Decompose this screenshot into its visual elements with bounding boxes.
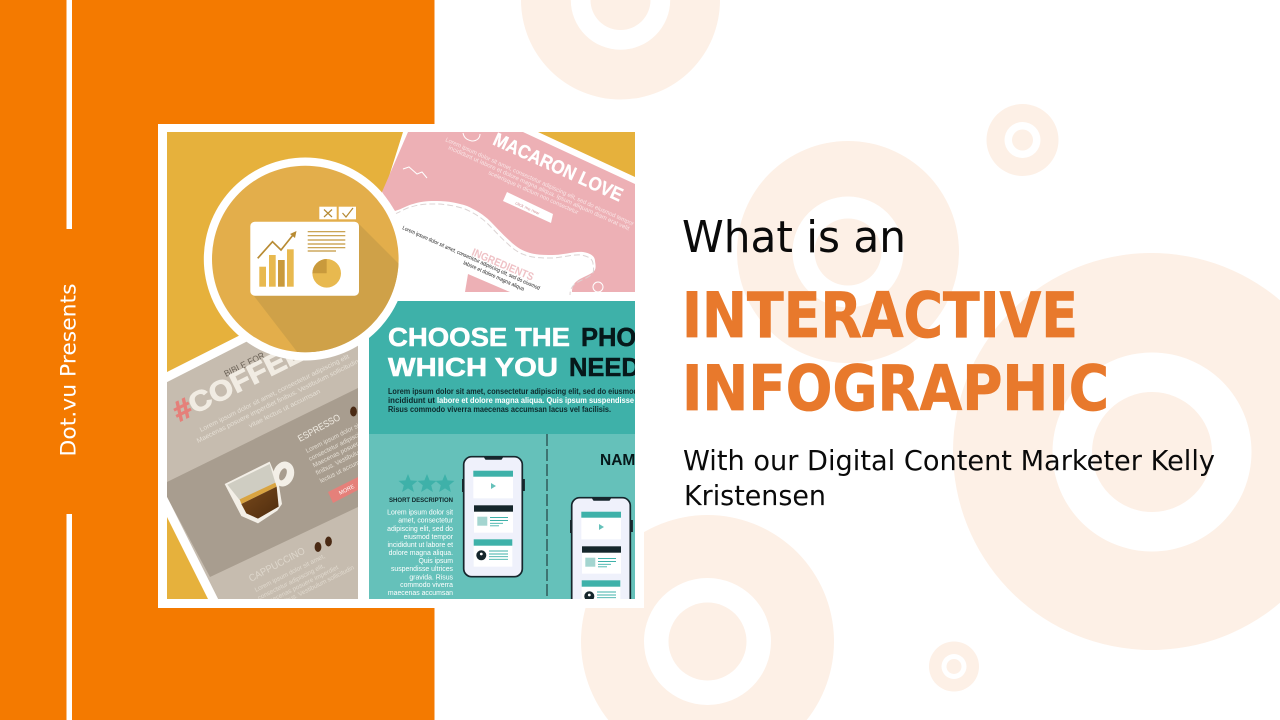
intro line 3: Risus commodo viverra maecenas accumsan lacus vel facilisis. bbox=[388, 404, 611, 414]
tile: macaron love bbox=[380, 129, 635, 295]
icon: check box bbox=[339, 207, 356, 219]
cappuccino lorem: Lorem ipsum dolor sit amet, bbox=[254, 553, 327, 594]
sidebar label: Dot.vu Presents bbox=[56, 284, 82, 456]
coffee darker band bbox=[167, 388, 358, 577]
short description body: Quis ipsum bbox=[419, 558, 453, 565]
short description body: Lorem ipsum dolor sit bbox=[387, 510, 453, 517]
dashboard card bbox=[250, 222, 359, 296]
title line: infographic: INFOGRAPHIC bbox=[682, 352, 1109, 425]
ingredients heading: INGREDIENTS bbox=[470, 247, 535, 284]
bar chart bbox=[259, 249, 294, 287]
coffee title: #COFFEE bbox=[168, 336, 310, 427]
coffee lorem line 1: Lorem ipsum dolor sit amet, consectetur adipiscing elit bbox=[199, 353, 351, 434]
small ring bbox=[593, 282, 603, 292]
intro line 1: Lorem ipsum dolor sit amet, consectetur adipiscing elit, sed do eiusmod bbox=[388, 386, 638, 396]
teal header band bbox=[369, 301, 635, 434]
macaron button bbox=[503, 192, 553, 223]
title line: what is an: What is an bbox=[682, 212, 906, 263]
zigzag icon bbox=[403, 167, 427, 178]
coffee subtitle: BIBLE FOR bbox=[222, 350, 267, 379]
macaron button label: click me now bbox=[515, 200, 540, 216]
intro line 2 white: labore et dolore magna aliqua. Quis ipsum suspendisse bbox=[437, 395, 634, 405]
espresso lorem bbox=[306, 423, 358, 483]
sidebar line: top bbox=[66, 0, 72, 229]
icon: coffee cup bbox=[225, 459, 297, 523]
title line: interactive: INTERACTIVE bbox=[682, 279, 1078, 352]
dashed blob outline bbox=[395, 204, 594, 295]
ingredients button bbox=[465, 274, 510, 292]
short description body: amet, consectetur bbox=[398, 518, 454, 525]
subtitle line 1: With our Digital Content Marketer Kelly bbox=[683, 444, 1215, 477]
coffee lorem line 2: Maecenas posuere imperdiet finibus. Vestibulum sollicitudin bbox=[196, 358, 360, 445]
background ring: centre behind heading bbox=[737, 141, 959, 363]
headline line 1: CHOOSE THE bbox=[388, 324, 570, 352]
cake icon bbox=[463, 133, 480, 141]
icon: three stars bbox=[398, 474, 454, 492]
tile: coffee bbox=[167, 342, 358, 599]
cappuccino heading: CAPPUCCINO bbox=[247, 546, 307, 585]
cappuccino lorem: Maecenas posuere imperdiet bbox=[264, 564, 340, 607]
collage contents bbox=[167, 132, 635, 599]
icon: espresso bean bbox=[350, 406, 357, 416]
espresso heading: ESPRESSO bbox=[296, 412, 343, 445]
headline line 2 dark word: NEED bbox=[569, 354, 640, 382]
espresso lorem: consectetur adipiscing bbox=[308, 429, 367, 463]
icon: phone one bbox=[462, 457, 525, 577]
icon: phone two bbox=[570, 498, 633, 618]
icon: cappuccino beans bbox=[315, 536, 332, 552]
second column name: NAME bbox=[600, 452, 646, 469]
ingredients lorem line 2: labore et dolore magna aliqua bbox=[462, 260, 526, 293]
short description body: dolore magna aliqua. bbox=[389, 550, 453, 557]
subtitle line 2: Kristensen bbox=[684, 479, 826, 512]
white blob bbox=[380, 192, 596, 292]
badge: chart icon circle bbox=[204, 158, 470, 440]
background ring: top bbox=[521, 0, 720, 100]
teal lower band bbox=[369, 434, 635, 599]
tile: choose the phone bbox=[369, 301, 635, 599]
trend arrow bbox=[258, 231, 296, 258]
macaron lorem line 1: Lorem ipsum dolor sit amet, consectetur adipiscing elit, sed do eiusmod tempor bbox=[444, 137, 634, 228]
panel: orange sidebar bbox=[0, 0, 434, 720]
panel: infographic collage frame bbox=[158, 124, 672, 618]
short description body: eiusmod tempor bbox=[404, 534, 454, 541]
coffee lorem line 3: vitae lectus ut accumsan bbox=[248, 388, 322, 430]
more button bbox=[328, 477, 358, 503]
macaron lorem line 3: scelerisque in dictum non consectetur bbox=[487, 170, 579, 216]
background ring: bottom centre bbox=[581, 515, 834, 720]
cappuccino lorem: consectetur adipiscing elit, bbox=[257, 562, 326, 602]
espresso lorem: finibus. Vestibulum bbox=[315, 447, 365, 477]
icon: cross box bbox=[319, 207, 337, 219]
more button label: MORE bbox=[338, 484, 356, 497]
background ring: small bottom bbox=[929, 642, 979, 692]
espresso lorem: lectus ut accumsan bbox=[319, 454, 371, 485]
headline line 1 dark word: PHONE bbox=[581, 324, 672, 352]
sidebar line: bottom bbox=[66, 514, 72, 720]
yellow backdrop bbox=[167, 132, 635, 599]
white gutters bbox=[167, 132, 635, 599]
background ring: small upper right bbox=[986, 104, 1058, 176]
background ring: large right bbox=[953, 253, 1280, 650]
headline line 2: WHICH YOU bbox=[388, 354, 558, 382]
espresso lorem: Maecenas posuere bbox=[312, 439, 363, 469]
macaron title: MACARON LOVE bbox=[490, 129, 626, 206]
macaron lorem line 2: incididunt ut labore et dolore magna aliqua. Ipsum aliquam diam erat velit bbox=[447, 145, 630, 232]
cappuccino lorem bbox=[254, 554, 354, 599]
short description body: gravida. Risus bbox=[409, 574, 454, 582]
pie chart bbox=[312, 259, 341, 288]
short description body: maecenas accumsan bbox=[388, 590, 453, 597]
short description body: commodo viverra bbox=[400, 582, 453, 589]
cappuccino lorem: finibus. Vestibulum sollicitudin bbox=[278, 564, 356, 608]
short description body: incididunt ut labore et bbox=[387, 542, 453, 549]
ingredients lorem line 1: Lorem ipsum dolor sit amet, consectetur adipiscing elit, sed do eiusmod bbox=[401, 225, 541, 292]
short description body: adipiscing elit, sed do bbox=[387, 526, 453, 533]
text lines bbox=[308, 232, 345, 251]
short description heading: SHORT DESCRIPTION bbox=[389, 497, 453, 504]
badge long shadow bbox=[254, 224, 470, 440]
short description body bbox=[387, 510, 454, 597]
intro line 2 dark: incididunt ut bbox=[388, 395, 435, 405]
dashed divider bbox=[546, 434, 548, 599]
espresso lorem: Lorem ipsum dolor sit bbox=[305, 422, 362, 455]
short description body: suspendisse ultrices bbox=[391, 566, 454, 573]
